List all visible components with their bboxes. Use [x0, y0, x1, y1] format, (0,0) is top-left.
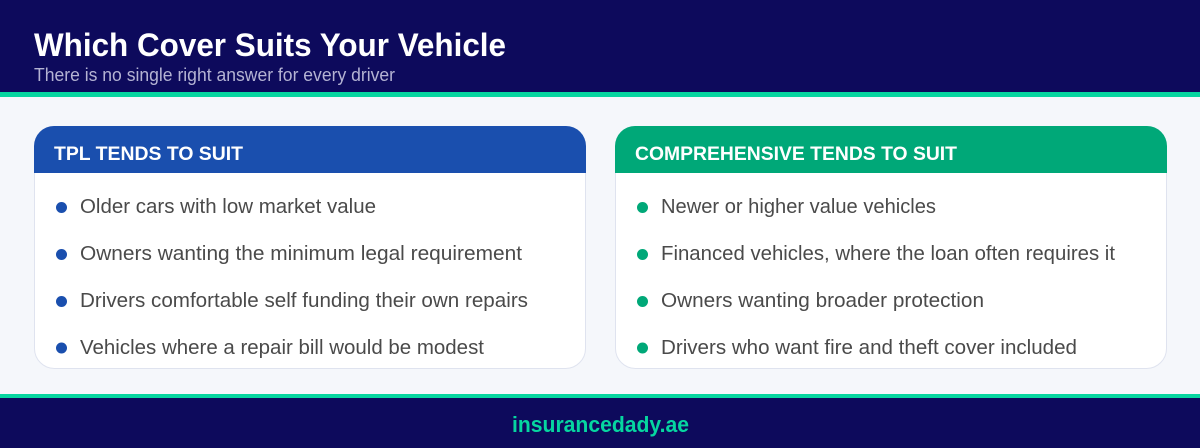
panel header: TPL: [34, 126, 586, 173]
panel header: Comprehensive: [615, 126, 1167, 173]
header band: [0, 0, 1200, 97]
footer website: insurancedady.ae: [512, 412, 689, 437]
list item: financed vehicles: Financed vehicles, where the loan often requires it: [661, 242, 1115, 265]
list item: modest repair bill: Vehicles where a repair bill would be modest: [80, 336, 484, 359]
footer band: [0, 394, 1200, 448]
list item: broader protection: Owners wanting broader protection: [661, 289, 984, 312]
list item: older cars: Older cars with low market value: [80, 195, 376, 218]
panel header: Comprehensive: COMPREHENSIVE TENDS TO SUIT: [635, 143, 957, 165]
subtitle: There is no single right answer for every driver: [34, 65, 395, 85]
list item: newer vehicles: Newer or higher value vehicles: [661, 195, 936, 218]
title: Which Cover Suits Your Vehicle: [34, 27, 506, 63]
panel header: TPL: TPL TENDS TO SUIT: [54, 143, 243, 165]
panel: TPL tends to suit: [34, 126, 586, 368]
list item: fire and theft: Drivers who want fire and theft cover included: [661, 336, 1077, 359]
list item: self funding repairs: Drivers comfortable self funding their own repairs: [80, 289, 528, 312]
panel: Comprehensive tends to suit: [615, 126, 1167, 368]
list item: minimum legal requirement: Owners wanting the minimum legal requirement: [80, 242, 522, 265]
